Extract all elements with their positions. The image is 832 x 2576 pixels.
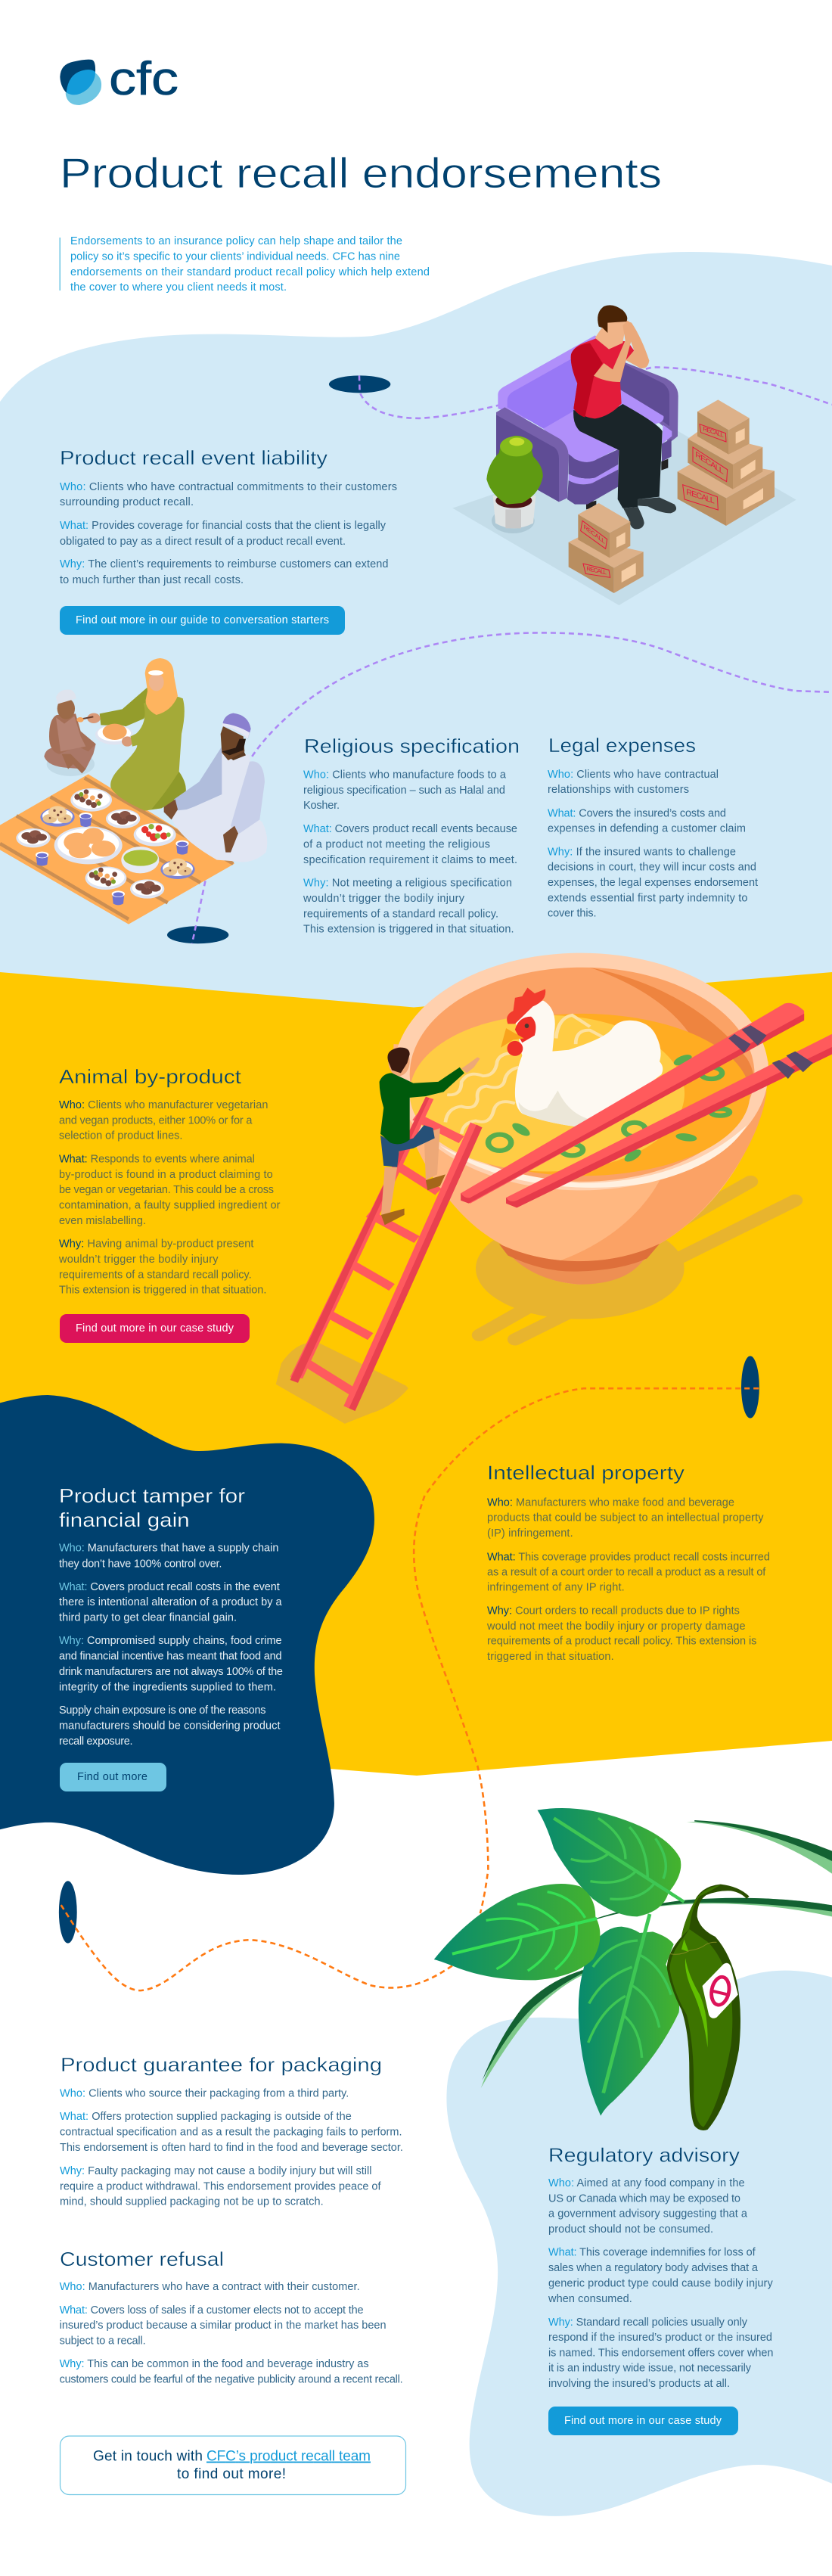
- text block: by-product is found in a product claiming to: [59, 1169, 273, 1181]
- text block: insured’s product because a similar product in the market has been: [60, 2320, 387, 2332]
- woman: [76, 658, 186, 811]
- text block: Why: This can be common in the food and beverage industry as: [60, 2358, 369, 2370]
- text block: would not meet the bodily injury or property damage: [486, 1620, 746, 1633]
- text block: wouldn’t trigger the bodily injury: [303, 893, 465, 905]
- heading: Product guarantee for packaging: [61, 2053, 382, 2076]
- middle leaf: [579, 1914, 679, 2116]
- chicken: [501, 987, 663, 1126]
- heading: Animal by-product: [59, 1065, 242, 1088]
- text block: This extension is triggered in that situation.: [303, 923, 514, 935]
- intro text block: policy so it’s specific to your clients’ individual needs. CFC has nine: [70, 251, 400, 263]
- illustration: noodle bowl with chicken, chopsticks and man on ladder: [276, 953, 832, 1424]
- panel: customer refusal: [60, 2248, 403, 2386]
- text block: Who: Clients who source their packaging from a third party.: [60, 2088, 349, 2100]
- text block: Who: Clients who have contractual commitments to their customers: [60, 481, 397, 493]
- text block: This extension is triggered in that situation.: [59, 1285, 266, 1297]
- button: Find out more in our case study: [76, 1322, 234, 1335]
- text block: involving the insured’s products at all.: [548, 2378, 730, 2390]
- text block: [548, 769, 758, 920]
- recall boxes: RECALL: [686, 488, 715, 506]
- text block: Who: Manufacturers who have a contract with their customer.: [60, 2281, 360, 2293]
- heading: Intellectual property: [487, 1462, 685, 1484]
- title: Product recall endorsements: [60, 149, 662, 197]
- intro text block: Endorsements to an insurance policy can help shape and tailor the: [70, 235, 402, 247]
- recall boxes: RECALL: [584, 523, 605, 545]
- text block: Why: Compromised supply chains, food crime: [59, 1635, 282, 1647]
- arrow: purple dashed path to the religious section: [252, 632, 832, 757]
- text block: requirements of a standard recall policy.: [303, 908, 498, 920]
- navy blob: [0, 1395, 374, 1875]
- left leaf: [434, 1884, 600, 1980]
- text block: to much further than just recall costs.: [60, 574, 244, 586]
- intro text block: [59, 235, 430, 294]
- heading: Product tamper for: [59, 1484, 245, 1507]
- illustration: family halal meal: [0, 658, 267, 924]
- text block: Why: Having animal by-product present: [59, 1238, 253, 1251]
- text block: expenses, the legal expenses endorsement: [548, 877, 758, 889]
- text block: when consumed.: [548, 2293, 632, 2305]
- panel: product guarantee for packaging: [60, 2053, 403, 2208]
- child: [44, 689, 96, 776]
- text block: contamination, a faulty supplied ingredient or: [59, 1200, 281, 1212]
- text block: generic product type could cause bodily injury: [548, 2278, 773, 2290]
- chilli pepper: [667, 1885, 750, 2130]
- text block: Why: If the insured wants to challenge: [548, 846, 736, 858]
- icon: prohibited label: [703, 1963, 738, 2018]
- text block: infringement of any IP right.: [487, 1581, 625, 1593]
- button: Find out more: [77, 1771, 147, 1783]
- thin leaves and vine: [481, 1820, 832, 2088]
- heading: Religious specification: [304, 735, 520, 757]
- text block: What: Provides coverage for financial costs that the client is legally: [60, 520, 387, 532]
- logo: [60, 53, 179, 105]
- text block: contractual specification and as a result the packaging fails to perform.: [60, 2126, 402, 2138]
- text block: Kosher.: [303, 800, 340, 812]
- panel: product recall event liability: [60, 446, 397, 635]
- text block: [58, 1099, 281, 1297]
- panel: religious specification: [303, 735, 520, 935]
- text block: [548, 2177, 773, 2390]
- heading: financial gain: [59, 1509, 190, 1531]
- chopsticks: [461, 1003, 832, 1207]
- illustration: worried man on sofa with recall boxes: [452, 305, 796, 605]
- ladder: [290, 1097, 482, 1411]
- text block: expenses in defending a customer claim: [548, 823, 746, 835]
- text block: US or Canada which may be exposed to: [548, 2192, 740, 2205]
- text block: What: Covers the insured’s costs and: [548, 807, 726, 819]
- panel: regulatory advisory: [548, 2144, 773, 2435]
- text block: Why: Faulty packaging may not cause a bodily injury but will still: [60, 2165, 372, 2177]
- text block: drink manufacturers are not always 100% of the: [59, 1666, 283, 1678]
- food plates: [16, 788, 195, 905]
- text block: requirements of a standard recall policy.: [59, 1269, 252, 1281]
- man on ladder: [380, 1047, 480, 1225]
- text block: religious specification – such as Halal and: [303, 785, 505, 797]
- text block: specification requirement it claims to meet.: [303, 854, 517, 866]
- text block: triggered in that situation.: [487, 1651, 614, 1663]
- text block: Supply chain exposure is one of the reasons: [59, 1704, 266, 1717]
- text block: [60, 481, 397, 586]
- hole: purple path end: [167, 881, 228, 943]
- text block: cover this.: [548, 908, 596, 920]
- text block: mind, should supplied packaging not be up to scratch.: [60, 2196, 324, 2208]
- callout: get in touch box: CFC’s product recall team: [206, 2449, 371, 2465]
- top leaf: [538, 1808, 684, 1916]
- button: [60, 606, 345, 635]
- callout: get in touch box: to find out more!: [177, 2466, 286, 2482]
- panel: intellectual property: [486, 1462, 770, 1663]
- text block: surrounding product recall.: [60, 496, 194, 508]
- text block: Who: Clients who have contractual: [548, 769, 719, 781]
- text block: product should not be consumed.: [548, 2223, 713, 2236]
- text block: even mislabelling.: [59, 1215, 146, 1227]
- bowl: [393, 953, 768, 1285]
- text block: (IP) infringement.: [487, 1527, 573, 1540]
- text block: require a product withdrawal. This endorsement provides peace of: [60, 2180, 381, 2192]
- shadows: [276, 1182, 795, 1424]
- text block: What: Covers product recall costs in the event: [59, 1581, 280, 1593]
- sofa: [496, 335, 678, 509]
- text block: it is an industry wide issue, not necessarily: [548, 2363, 752, 2375]
- text block: Who: Aimed at any food company in the: [548, 2177, 745, 2189]
- spring onions: [488, 1052, 730, 1164]
- text block: Who: Clients who manufacturer vegetarian: [59, 1099, 268, 1111]
- text block: extends essential first party indemnity to: [548, 892, 747, 904]
- callout: get in touch box: [61, 2436, 405, 2495]
- text block: and financial incentive has meant that food and: [59, 1650, 282, 1662]
- mat: [0, 774, 234, 924]
- text block: obligated to pay as a direct result of a product recall event.: [60, 536, 346, 548]
- text block: [59, 1543, 283, 1748]
- intro text block: endorsements on their standard product recall policy which help extend: [70, 266, 430, 278]
- text block: [60, 2281, 403, 2386]
- arrow: orange dashed path from hole around intellectual property: [414, 1356, 759, 1913]
- text block: they don’t have 100% control over.: [59, 1558, 222, 1571]
- text block: customers could be fearful of the negative publicity around a recent recall.: [60, 2374, 403, 2386]
- text block: as a result of a court order to recall a product as a result of: [487, 1567, 766, 1579]
- text block: is named. This endorsement offers cover when: [548, 2347, 773, 2359]
- illustration: chilli pepper and leaves: [434, 1808, 832, 2130]
- text block: manufacturers should be considering product: [59, 1720, 280, 1732]
- text block: relationships with customers: [548, 784, 689, 796]
- heading: Product recall event liability: [60, 446, 328, 469]
- man: [571, 305, 676, 529]
- heading: Regulatory advisory: [548, 2144, 740, 2167]
- text block: [303, 769, 517, 935]
- text block: a government advisory suggesting that a: [548, 2208, 748, 2220]
- background: yellow band: [0, 972, 832, 1776]
- text block: of a product not meeting the religious: [303, 838, 490, 850]
- text block: and vegan products, either 100% or for a: [59, 1114, 253, 1126]
- text block: Who: Manufacturers that have a supply chain: [59, 1543, 278, 1555]
- text block: What: Covers product recall events because: [303, 823, 517, 835]
- text block: subject to a recall.: [60, 2335, 146, 2347]
- panel: product tamper for financial gain: [0, 1395, 374, 1875]
- recall boxes: RECALL: [586, 565, 607, 576]
- text block: Why: Not meeting a religious specification: [303, 878, 512, 890]
- text block: What: This coverage provides product recall costs incurred: [487, 1551, 770, 1563]
- background: light blue wave: [0, 252, 832, 1120]
- text block: Who: Clients who manufacture foods to a: [303, 769, 507, 781]
- noodles: [445, 1015, 603, 1134]
- text block: sales when a regulatory body advises that a: [548, 2262, 759, 2274]
- button: [60, 1314, 250, 1343]
- text block: [60, 2088, 403, 2208]
- recall boxes: [569, 399, 775, 593]
- background: bottom light blue blob: [446, 1971, 832, 2516]
- text block: integrity of the ingredients supplied to them.: [59, 1681, 276, 1693]
- arrow: purple dashed path from hole to the sofa and beyond: [329, 367, 832, 418]
- text block: What: Offers protection supplied packaging is outside of the: [60, 2111, 352, 2123]
- recall boxes: RECALL: [695, 449, 724, 477]
- heading: Legal expenses: [548, 734, 696, 757]
- button: [60, 1763, 166, 1791]
- panel: animal by-product: [58, 1065, 281, 1343]
- text block: [486, 1496, 770, 1663]
- button: Find out more in our guide to conversation starters: [76, 614, 329, 626]
- plant: [486, 436, 543, 533]
- text block: Why: Court orders to recall products due to IP rights: [487, 1605, 740, 1617]
- intro text block: the cover to where you client needs it most.: [70, 281, 287, 294]
- heading: [59, 1484, 245, 1531]
- text block: What: This coverage indemnifies for loss of: [548, 2247, 756, 2259]
- text block: What: Responds to events where animal: [59, 1153, 255, 1165]
- text block: products that could be subject to an intellectual property: [487, 1512, 764, 1524]
- text block: recall exposure.: [59, 1735, 133, 1748]
- button: [548, 2407, 738, 2435]
- text block: there is intentional alteration of a product by a: [59, 1596, 283, 1608]
- button: Find out more in our case study: [564, 2415, 722, 2427]
- recall boxes: RECALL: [703, 425, 724, 439]
- callout: get in touch box: Get in touch with: [93, 2449, 203, 2465]
- text block: be vegan or vegetarian. This could be a cross: [59, 1184, 274, 1196]
- text block: respond if the insured’s product or the insured: [548, 2332, 772, 2344]
- text block: requirements of a product recall policy. This extension is: [487, 1636, 756, 1648]
- text block: What: Covers loss of sales if a customer elects not to accept the: [60, 2304, 364, 2317]
- text block: decisions in court, they will incur costs and: [548, 862, 756, 874]
- man: [164, 713, 267, 862]
- text block: Why: The client’s requirements to reimburse customers can extend: [60, 558, 389, 570]
- text block: This endorsement is often hard to find in the food and beverage sector.: [60, 2142, 403, 2154]
- heading: Customer refusal: [60, 2248, 224, 2270]
- arrow: orange dashed path from left hole to leaf: [59, 1881, 454, 1990]
- text block: wouldn’t trigger the bodily injury: [58, 1254, 219, 1266]
- logo: cfc: [109, 53, 179, 105]
- text block: third party to get clear financial gain.: [59, 1611, 237, 1624]
- panel: legal expenses: [548, 734, 758, 920]
- text block: Why: Standard recall policies usually only: [548, 2317, 748, 2329]
- text block: selection of product lines.: [59, 1130, 182, 1142]
- text block: Who: Manufacturers who make food and beverage: [487, 1496, 734, 1509]
